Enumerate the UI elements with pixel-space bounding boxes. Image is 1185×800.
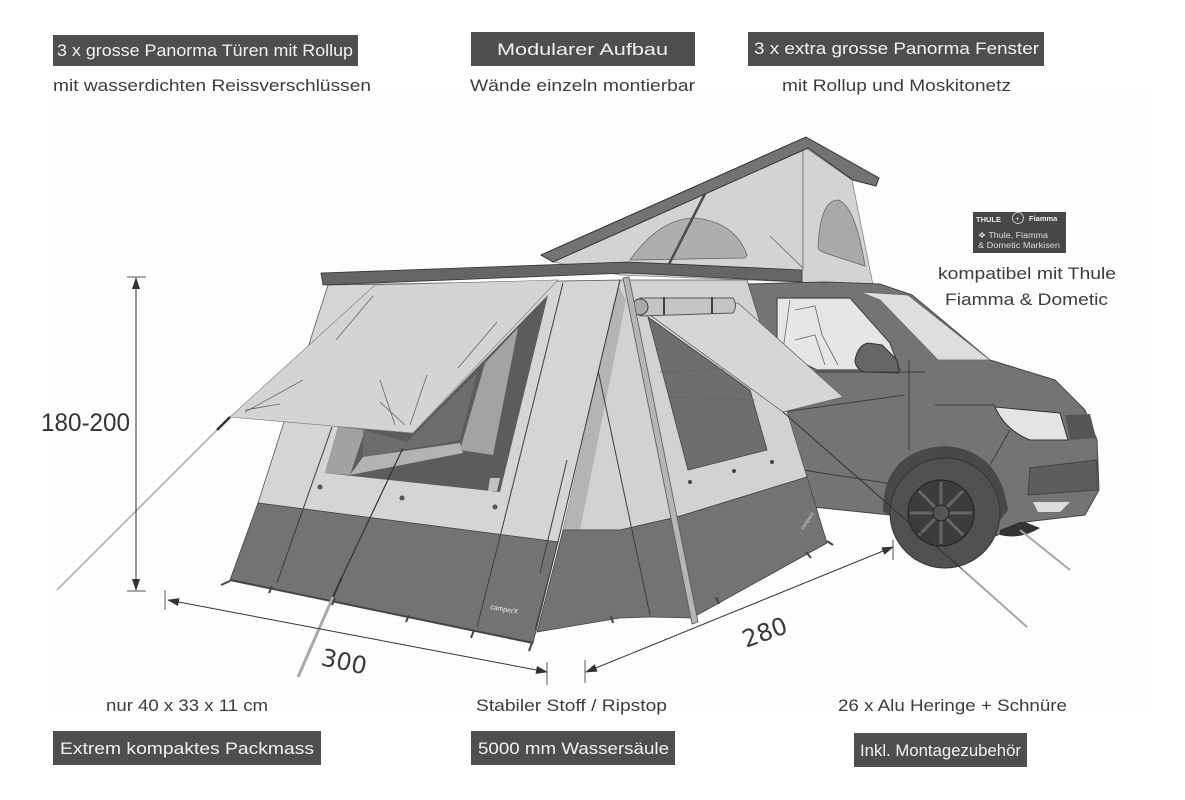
- base edge: [230, 580, 533, 643]
- van illustration: [541, 137, 1099, 568]
- label: water column: [471, 696, 675, 765]
- wheel: [890, 458, 1000, 568]
- compatibility badge: ❖ Thule, Fiamma: [978, 231, 1049, 240]
- compatibility badge: THULE: [976, 215, 1001, 224]
- rolled canvas: [632, 297, 736, 316]
- side flap: [650, 303, 843, 412]
- dimension: height: 180-200: [41, 409, 130, 437]
- side window: [648, 317, 767, 470]
- body lines: [783, 360, 1010, 486]
- label: panorama windows: mit Rollup und Moskitonetz: [782, 76, 1011, 95]
- compatibility badge: & Dometic Markisen: [978, 241, 1060, 250]
- mirror: [855, 343, 899, 373]
- compatibility badge: +: [1016, 216, 1020, 223]
- front flap: [230, 280, 558, 433]
- label: modular structure: [470, 32, 695, 95]
- compatibility text: [938, 264, 1116, 309]
- wordmark: camperX: [800, 511, 816, 531]
- van body: [747, 282, 1099, 540]
- pop-up roof tent: [541, 137, 879, 285]
- front window: [325, 295, 548, 492]
- compatibility text: kompatibel mit Thule: [938, 264, 1116, 283]
- compatibility badge: Fiamma: [1029, 214, 1058, 223]
- dimension: width 300: 300: [319, 643, 369, 680]
- dimension: height: [41, 277, 146, 591]
- label: water column: Stabiler Stoff / Ripstop: [476, 696, 667, 715]
- dimension: depth 280: [585, 540, 893, 683]
- label: accessories: [838, 696, 1067, 767]
- pole: [623, 277, 698, 624]
- dimension: depth 280: 280: [738, 612, 791, 654]
- dimension: width 300: [165, 590, 547, 685]
- label: accessories: Inkl. Montagezubehör: [860, 741, 1021, 760]
- label: modular structure: Wände einzeln montierbar: [470, 76, 695, 95]
- label: panorama windows: [748, 32, 1044, 95]
- seat: [783, 300, 838, 365]
- label: pack size: Extrem kompaktes Packmass: [60, 739, 314, 758]
- wheel arch: [883, 446, 1008, 540]
- label: panorama doors: [53, 35, 371, 95]
- compatibility text: Fiamma & Dometic: [945, 290, 1109, 309]
- label: panorama windows: 3 x extra grosse Panorma Fenster: [754, 39, 1039, 58]
- label: modular structure: Modularer Aufbau: [497, 40, 668, 59]
- label: pack size: nur 40 x 33 x 11 cm: [106, 696, 268, 715]
- grille: [1065, 414, 1096, 440]
- compatibility badge: [973, 212, 1066, 253]
- label: accessories: 26 x Alu Heringe + Schnüre: [838, 696, 1067, 715]
- wordmark: camperX: [490, 604, 519, 616]
- front bumper shadow: [1000, 522, 1040, 536]
- side window: [777, 298, 900, 370]
- wall seams: [277, 280, 620, 630]
- guy lines and pegs: [57, 412, 1070, 677]
- tent front wall: [230, 280, 620, 643]
- label: panorama doors: mit wasserdichten Reissverschlüssen: [53, 76, 371, 95]
- inner side folds: [598, 370, 650, 615]
- tent side wall: [537, 277, 843, 632]
- awning rail: [321, 262, 802, 285]
- label: panorama doors: 3 x grosse Panorma Türen mit Rollup: [57, 41, 353, 60]
- windshield: [860, 292, 990, 360]
- label: pack size: [53, 696, 321, 765]
- headlight: [995, 407, 1068, 440]
- label: water column: 5000 mm Wassersäule: [478, 739, 669, 758]
